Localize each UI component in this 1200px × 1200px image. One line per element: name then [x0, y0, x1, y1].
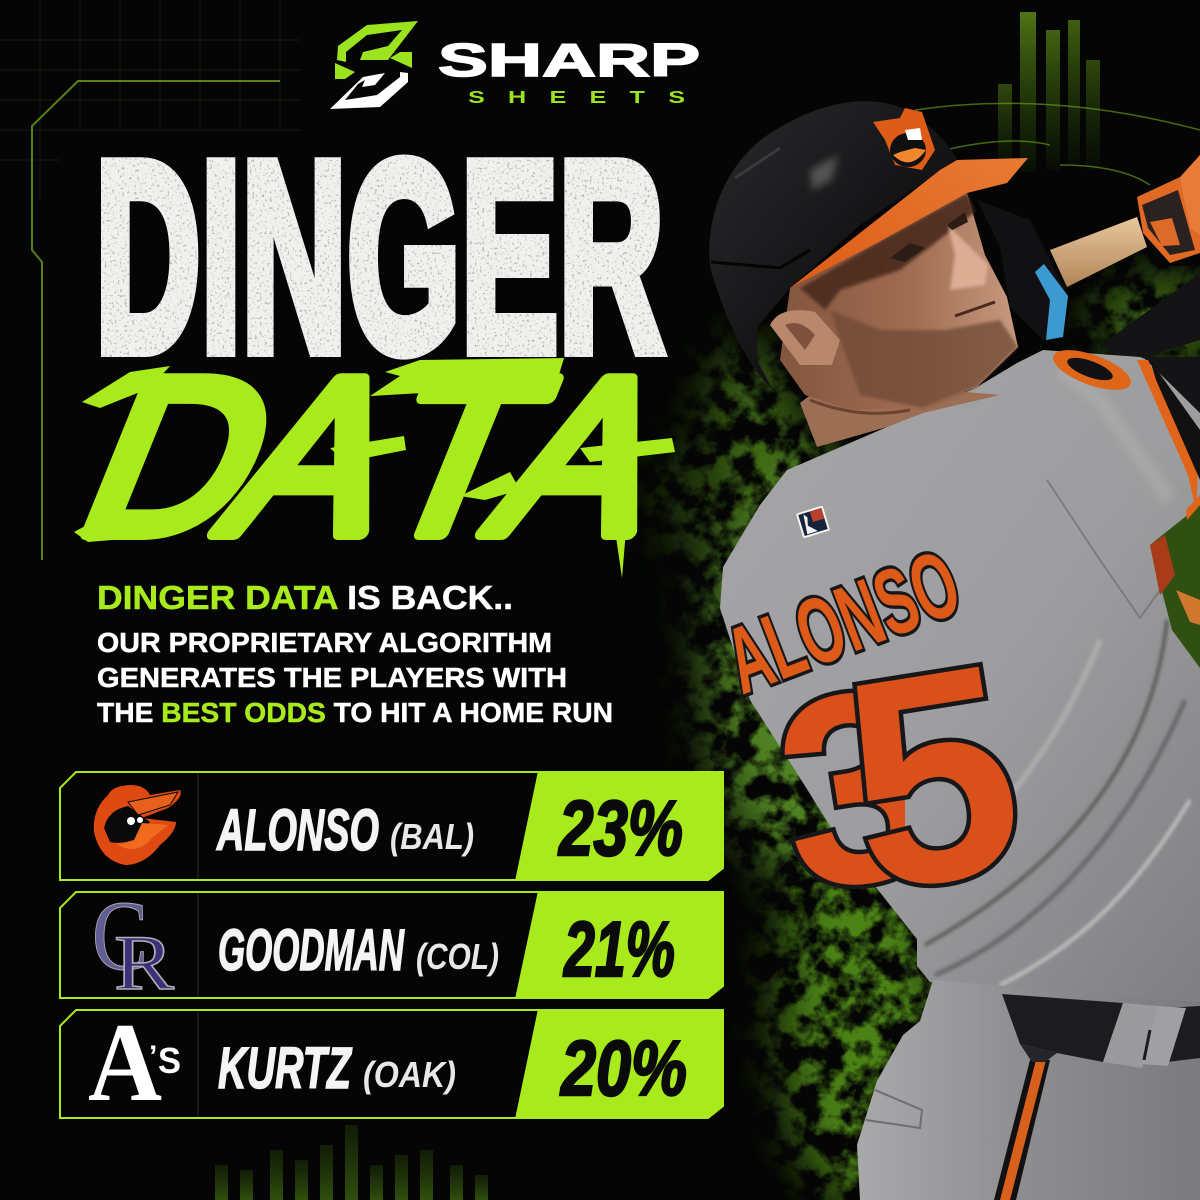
intro text block — [97, 579, 613, 728]
ear flap — [977, 200, 1068, 340]
pants — [857, 980, 1200, 1200]
team code: (BAL) — [390, 816, 474, 857]
face shadow under visor — [800, 193, 975, 310]
helmet — [709, 101, 957, 390]
player name: GOODMAN — [218, 918, 405, 983]
percentage: 23% — [557, 784, 683, 872]
row: Goodman — [60, 880, 724, 1006]
jersey name ALONSO: ALONSO — [712, 530, 973, 714]
percentage: 21% — [563, 905, 675, 993]
icon: Rockies logo: R — [114, 919, 174, 1006]
row: Kurtz — [60, 1001, 724, 1125]
paint splatter texture — [662, 275, 1200, 1200]
icon: Orioles logo — [94, 785, 181, 865]
ear — [770, 310, 840, 365]
helmet highlight — [810, 155, 838, 190]
logo wordmark SHEETS: SHEETS — [468, 87, 685, 107]
intro text block: THE BEST ODDS TO HIT A HOME RUN — [97, 697, 613, 728]
sleeve trim — [1143, 357, 1200, 413]
icon: Athletics logo: A — [88, 1001, 162, 1125]
player name: ALONSO — [216, 798, 379, 863]
beard — [830, 310, 1018, 408]
nose highlight — [948, 225, 988, 290]
bat and gloves — [1050, 155, 1200, 362]
jersey — [720, 350, 1200, 1003]
visor — [790, 158, 1028, 288]
intro text block: DINGER DATA IS BACK.. — [97, 579, 513, 616]
right side gap — [1150, 505, 1200, 668]
neck — [800, 380, 1000, 447]
icon: Athletics logo: S — [158, 1040, 181, 1081]
intro text block: GENERATES THE PLAYERS WITH — [97, 662, 567, 693]
frame outline around title — [32, 81, 280, 560]
percentage: 20% — [559, 1024, 687, 1112]
pants stripe — [994, 1060, 1050, 1200]
icon: Rockies logo: C — [92, 880, 148, 991]
bar chart decoration: bottom — [215, 1125, 488, 1200]
mouth — [955, 302, 995, 316]
faint grid — [0, 0, 300, 200]
jersey fold highlights — [925, 370, 1190, 985]
player photo illustration — [709, 101, 1200, 1200]
row: Alonso — [60, 771, 724, 881]
shoulder patch — [1048, 342, 1136, 398]
icon: logo mark — [330, 21, 418, 109]
helmet logo — [873, 108, 935, 170]
jersey number 35: 3 — [759, 628, 954, 949]
brush streaks — [74, 358, 675, 578]
jersey number 35: 5 — [825, 600, 1041, 955]
player name: KURTZ — [218, 1036, 353, 1101]
MLB logo — [796, 505, 830, 539]
belt — [1002, 994, 1123, 1062]
team code: (COL) — [416, 936, 499, 977]
icon: Athletics logo: ’ — [149, 1040, 157, 1073]
radar arcs — [915, 103, 1200, 185]
pocket — [866, 1090, 922, 1128]
team code: (OAK) — [363, 1054, 456, 1095]
face — [780, 193, 1018, 410]
intro text block: OUR PROPRIETARY ALGORITHM — [97, 627, 552, 658]
title: DATA: DATA — [51, 332, 711, 580]
logo: Sharp Sheets — [330, 21, 700, 109]
logo wordmark SHARP: SHARP — [438, 34, 700, 86]
bar chart decoration: top right — [998, 12, 1100, 174]
eyes — [890, 243, 925, 262]
jersey number 35 — [780, 662, 1018, 890]
title: DINGER: DINGER — [95, 107, 664, 408]
